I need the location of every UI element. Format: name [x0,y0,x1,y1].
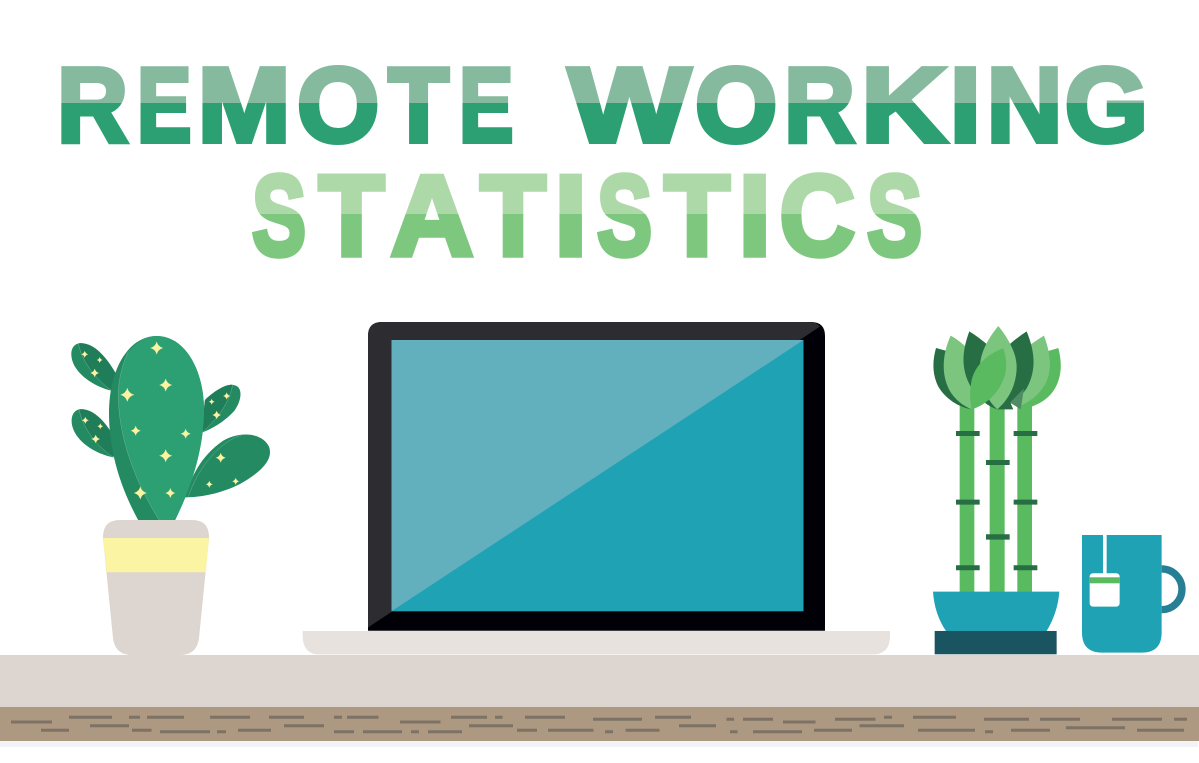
title: remote working: I [950,46,981,165]
title: statistics: T [664,153,730,280]
laptop screen [392,340,804,611]
title: statistics: C [780,153,855,280]
title: remote working [57,45,1148,165]
title: remote working: T [388,46,449,164]
bamboo stems [956,400,1037,593]
cactus leaves [71,343,270,497]
title: statistics: S [867,153,922,280]
title: statistics [252,152,922,280]
desk [0,655,1199,747]
title: remote working: N [987,47,1062,165]
title: remote working: G [1065,46,1148,164]
cactus pot [103,520,209,655]
laptop [303,322,890,654]
title: remote working: O [695,46,777,165]
title: remote working: O [297,46,379,165]
tea mug [1082,535,1182,653]
laptop bezel [368,322,825,631]
mug body [1082,535,1162,653]
title: remote working: E [137,46,191,165]
title: remote working: M [198,46,291,165]
title: statistics: A [391,153,473,280]
title: statistics: S [252,152,306,279]
title: statistics: T [480,153,546,280]
bamboo bowl [933,592,1059,633]
title: statistics: S [597,153,652,280]
cactus spines [81,342,239,500]
title: remote working: R [57,46,128,164]
cactus plant [71,336,270,655]
title: statistics: I [738,153,771,280]
mug handle [1162,569,1182,610]
title: remote working: K [861,45,946,164]
bamboo leaves [933,326,1061,409]
title: remote working: R [784,46,855,164]
cactus body [109,336,204,520]
tea bag [1090,535,1120,607]
bamboo plant [933,326,1061,654]
title: statistics: I [554,153,587,280]
title: remote working: W [568,46,691,165]
title: statistics: T [319,153,384,280]
laptop base [303,631,890,654]
title: remote working: E [459,46,513,165]
bowl stand [935,631,1057,654]
